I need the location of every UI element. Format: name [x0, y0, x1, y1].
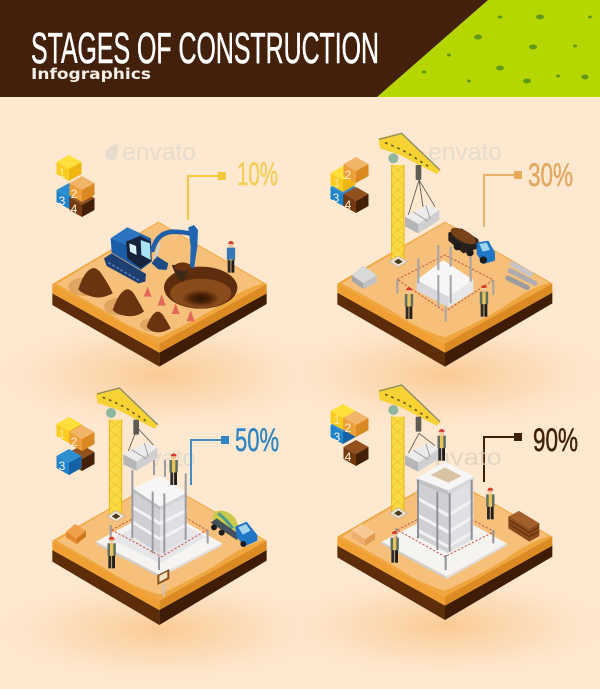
orange crate	[66, 524, 86, 544]
tower crane	[96, 387, 158, 522]
glow: under stage 1	[0, 313, 345, 437]
callout 10%: 10%	[237, 156, 278, 192]
excavation pit	[164, 267, 237, 309]
watermark: envato	[122, 139, 196, 166]
watermark: envato	[122, 445, 196, 472]
excavator	[104, 225, 198, 283]
legend cubes: 3	[333, 191, 340, 205]
legend cubes: 3	[334, 430, 341, 444]
site sign	[157, 569, 169, 597]
cardboard box	[352, 524, 375, 546]
callout 90%: 90%	[533, 422, 578, 458]
platform	[52, 480, 267, 625]
legend cubes: 2	[71, 187, 78, 201]
scene: near completion	[337, 384, 552, 620]
panel: stage 3, 50%	[52, 387, 279, 625]
legend cubes	[56, 417, 94, 475]
callout 10%	[188, 156, 278, 220]
legend cubes: 1	[59, 427, 66, 441]
traffic cones	[144, 287, 195, 321]
workers	[107, 453, 178, 568]
building frame	[111, 460, 208, 570]
legend cubes	[56, 155, 94, 217]
glow: under stage 2	[260, 313, 600, 437]
platform	[337, 475, 552, 620]
steel columns	[397, 245, 493, 322]
hoisted load	[405, 180, 439, 233]
hoisted load	[405, 433, 439, 472]
legend cubes: 1	[334, 176, 341, 190]
legend cubes: 4	[345, 198, 352, 212]
stacked pipes	[508, 264, 535, 288]
legend cubes: 2	[71, 435, 78, 449]
legend cubes: 2	[345, 421, 352, 435]
legend cubes: 3	[59, 459, 66, 473]
concrete blocks	[352, 266, 377, 289]
legend cubes: 4	[345, 450, 352, 464]
platform	[52, 222, 267, 367]
callout 50%: 50%	[235, 422, 279, 458]
base slab	[382, 509, 507, 579]
header banner	[0, 0, 600, 97]
subtitle: Infographics	[31, 65, 151, 83]
callout 50%	[191, 422, 279, 485]
glow: under stage 3	[0, 572, 345, 688]
barrier tape	[112, 503, 207, 557]
panel: stage 2, 30%	[330, 133, 573, 367]
scene: foundation	[337, 133, 552, 367]
hoisted load	[123, 428, 158, 471]
base slab	[96, 507, 222, 577]
tower crane	[378, 133, 441, 267]
cement mixer truck	[209, 506, 257, 547]
workers	[405, 285, 488, 319]
legend cubes: 1	[59, 166, 66, 180]
legend cubes: 4	[71, 450, 78, 464]
platform	[337, 222, 552, 367]
barrier tape	[397, 505, 494, 557]
panel: stage 4, 90%	[330, 384, 578, 620]
green corner	[377, 0, 600, 97]
callout 90%	[484, 422, 578, 482]
workers	[390, 429, 494, 563]
scene: excavation	[52, 222, 267, 367]
watermark: envato	[428, 139, 502, 166]
callout 30%: 30%	[528, 157, 573, 193]
panel: stage 1, 10%	[52, 139, 278, 367]
legend cubes: 1	[334, 413, 341, 427]
legend cubes: 3	[59, 194, 66, 208]
dump truck	[448, 224, 495, 264]
barrier tape	[397, 255, 493, 312]
soil mounds	[68, 268, 171, 332]
legend cubes: 4	[71, 202, 78, 216]
building	[396, 462, 493, 570]
timber stack	[508, 511, 539, 542]
legend cubes: 2	[345, 168, 352, 182]
callout 30%	[484, 157, 573, 227]
worker	[227, 241, 235, 273]
glow: under stage 4	[260, 568, 600, 684]
legend cubes	[330, 157, 368, 213]
watermark: nvato	[435, 444, 502, 470]
tower crane	[378, 384, 441, 519]
scene: frame rising	[52, 387, 267, 625]
foundation slab	[417, 260, 473, 307]
legend cubes	[330, 404, 368, 466]
